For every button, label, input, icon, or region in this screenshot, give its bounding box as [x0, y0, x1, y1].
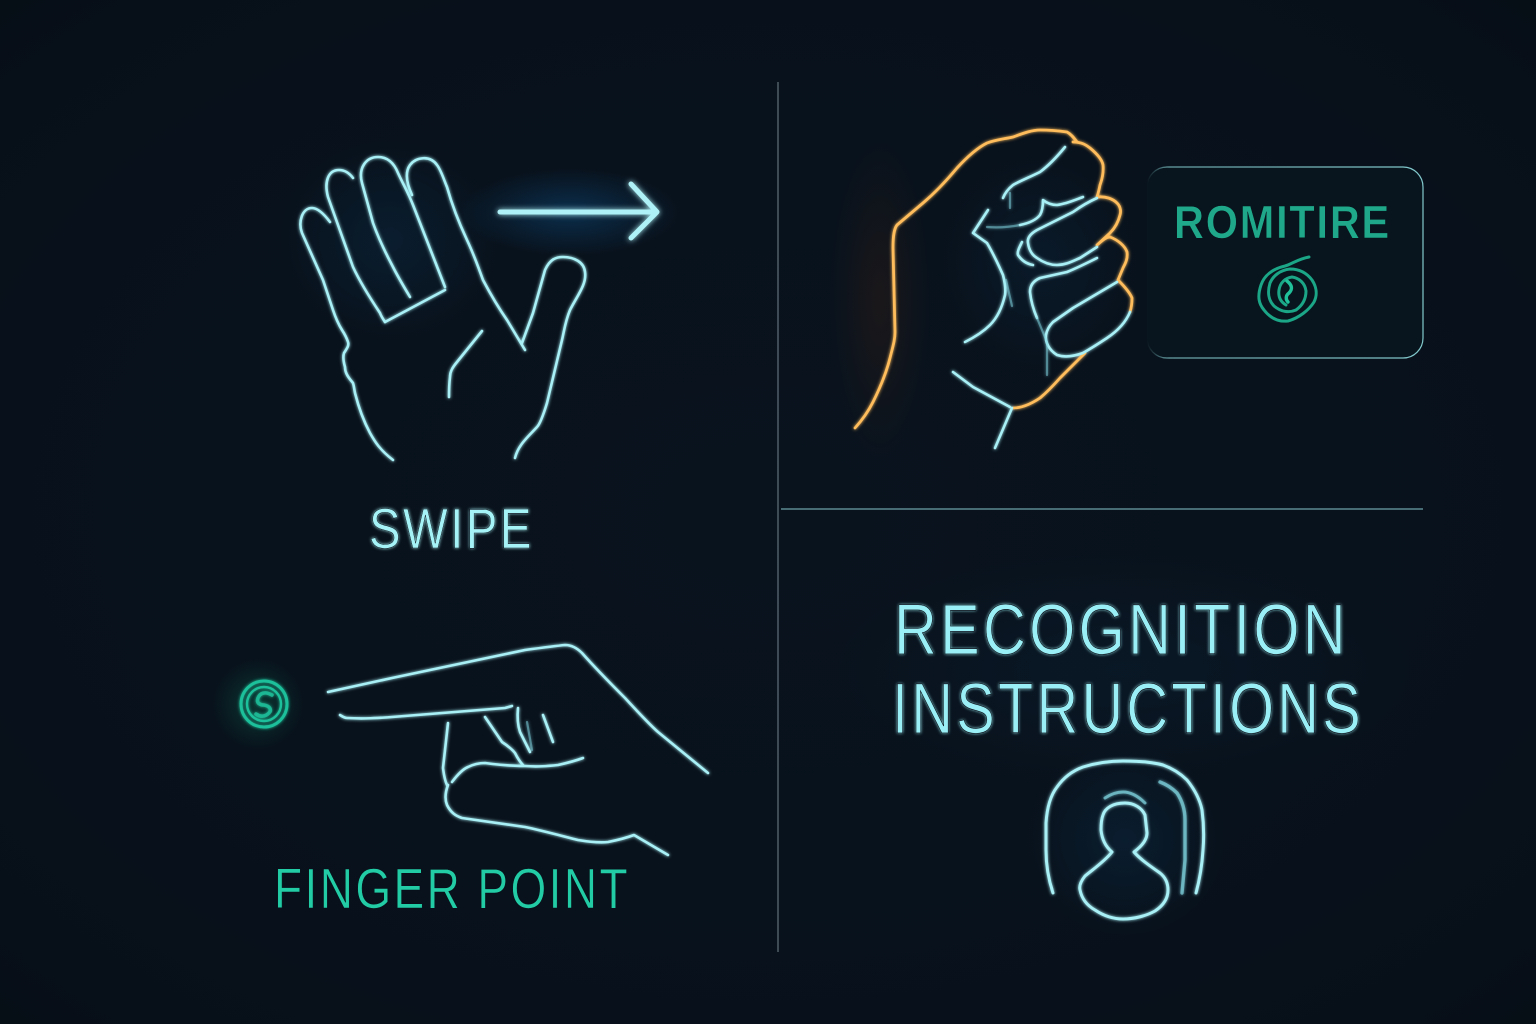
arrow: swipe right	[500, 184, 657, 238]
icon: fist	[855, 130, 1132, 448]
card: romitire	[1147, 167, 1423, 358]
label: swipe: SWIPE	[369, 497, 534, 561]
title	[892, 591, 1364, 749]
panel: recognition instructions	[892, 591, 1364, 919]
icon: open hand	[300, 157, 585, 460]
dividers	[778, 82, 1423, 952]
arrow and hand glow	[212, 140, 1415, 935]
card heading: ROMITIRE	[1174, 196, 1391, 248]
title: INSTRUCTIONS	[892, 670, 1364, 749]
label: finger point: FINGER POINT	[274, 857, 630, 921]
panel: fist gesture	[855, 130, 1423, 448]
panel: finger point gesture	[241, 645, 708, 921]
icon: touch target	[241, 681, 287, 727]
card outline	[1147, 167, 1423, 358]
title: RECOGNITION	[894, 591, 1349, 670]
panel: swipe gesture	[300, 157, 657, 561]
icon: pointing hand	[328, 645, 708, 855]
icon: user profile	[1046, 761, 1204, 919]
icon: spiral	[1259, 257, 1316, 321]
